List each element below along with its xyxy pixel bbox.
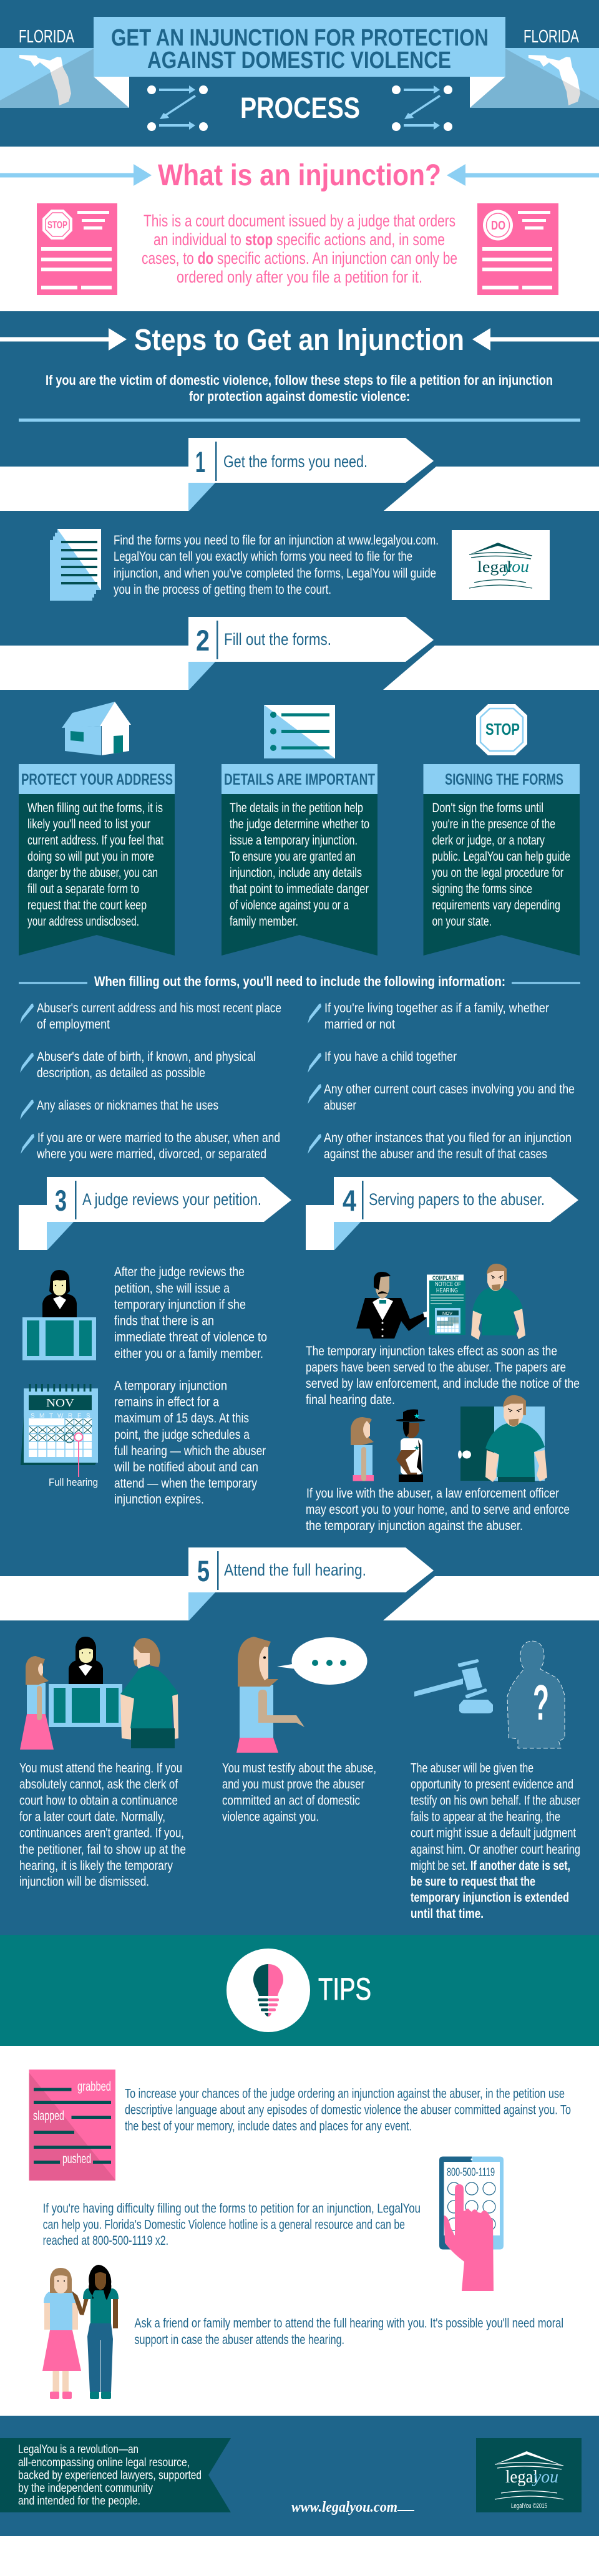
icon: descriptive document: slapped [33,2109,64,2123]
step 1 banner [0,438,599,511]
figure: woman in teal shirt and jeans [72,2265,119,2399]
step 5 text column 1: absolutely cannot, ask the clerk of [19,1778,178,1791]
icon: unknown person silhouette: ? [533,1675,549,1730]
icon: checklist [264,705,335,758]
step 3 banner [19,1177,291,1250]
list: right column: against the abuser and the result of that cases [324,1147,547,1161]
icon: calendar: NOV [46,1397,74,1409]
panel: details are important: DETAILS ARE IMPORTANT [224,771,375,788]
step 3 banner: 3 [55,1184,67,1217]
heading: tips: TIPS [318,1972,371,2007]
icon: light bulb [226,1949,310,2032]
section heading: steps [0,324,599,357]
list: left column: description, as detailed as possible [37,1066,205,1080]
icon: calendar [21,1384,98,1488]
tip 1 text [125,2087,571,2134]
step 1 banner: 1 [195,445,205,478]
step 5 text column 1: the petitioner, fail to show up at the [19,1842,186,1857]
figure: woman in blue shirt and pink skirt [42,2268,81,2399]
step 3 banner: A judge reviews your petition. [82,1190,261,1209]
tip 3 text [135,2317,563,2347]
about ribbon: and intended for the people. [18,2495,140,2508]
panel: signing the forms: on your state. [432,914,492,929]
icon: complaint and notice of hearing papers [427,1275,465,1335]
step 3 text second paragraph [114,1379,266,1507]
logo: LegalYou white box: you [502,557,529,576]
illustration: courtroom hearing [20,1637,178,1750]
list: left column: where you were married, divorced, or separated [36,1147,266,1161]
icon: calendar: S [31,1413,35,1420]
panel: details are important: To ensure you are granted an [230,850,356,864]
tip 3 text: support in case the abuser attends the hearing. [135,2333,344,2347]
step 5 text column 3: The abuser will be given the [411,1761,533,1775]
step 5 text column 3: until that time. [411,1907,484,1921]
illustration: officer escort at door [351,1395,547,1482]
desk [49,1684,122,1727]
icon: descriptive document [29,2070,115,2181]
icon: phone with hand [439,2157,504,2291]
step 3 text first paragraph: petition, she will issue a [114,1281,230,1296]
step 2 banner [0,617,599,690]
icon: stack of forms [50,529,101,601]
label: Florida left: FLORIDA [19,27,74,47]
tip 1 text: the best of your memory, include dates and places for any event. [125,2119,412,2134]
step 3 text second paragraph: point, the judge schedules a [114,1428,250,1442]
icon: calendar: T [49,1413,53,1420]
subtitle: process: PROCESS [240,91,360,124]
icon: process arrows right [392,85,452,131]
step 5 text column 1 [19,1761,186,1889]
intro text [46,372,553,404]
step 5 text column 1: injunction will be dismissed. [19,1875,149,1889]
list: right column: If you're living together as if a family, whether [324,1001,549,1015]
step 5 text column 2: committed an act of domestic [222,1794,360,1808]
heading: What is an injunction? [158,159,441,192]
step 4 banner: 4 [343,1184,356,1217]
panel: protect your address: likely you'll need to list your [27,817,150,831]
step 3 text second paragraph: maximum of 15 days. At this [114,1411,249,1426]
step 5 text column 2: violence against you. [222,1810,319,1824]
section: what is an injunction [0,159,599,295]
about ribbon [0,2438,231,2512]
list: left column: If you are or were married to the abuser, when and [37,1131,280,1145]
panel: signing the forms [423,764,580,956]
icon: do document: DO [491,219,505,233]
panel: details are important: injunction, include any details [230,866,362,880]
step 4 banner: Serving papers to the abuser. [369,1190,545,1209]
panel: details are important: family member. [230,914,298,929]
step 5 banner [0,1547,599,1620]
step 1 text: Find the forms you need to file for an injunction at www.legalyou.com. [114,533,439,548]
about ribbon: backed by experienced lawyers, supported [18,2469,202,2482]
illustration: two friends [42,2265,119,2399]
list: right column: abuser [324,1098,356,1113]
icon: house [62,702,131,755]
list: left column: Abuser's current address and his most recent place [37,1001,281,1015]
panel: signing the forms: clerk or judge, or a notary [432,833,545,848]
step 5 text column 3: might be set. If another date is set, [411,1859,570,1873]
figure: woman petitioner [20,1656,54,1750]
step 4 text first paragraph [306,1344,580,1407]
website url: www.legalyou.com [291,2499,397,2515]
icon: calendar: Full hearing [49,1476,98,1488]
panel: signing the forms: Don't sign the forms until [432,801,543,815]
logo: LegalYou footer box [476,2438,582,2512]
step 3 text second paragraph: attend — when the temporary [114,1476,257,1491]
step 1 text: injunction, and when you've completed the forms, LegalYou will guide [114,566,436,581]
icon: do document [477,203,558,295]
step 3 text first paragraph: either you or a family member. [114,1347,263,1361]
step 3 text first paragraph: immediate threat of violence to [114,1330,267,1345]
intro text: for protection against domestic violence: [189,389,410,404]
logo: LegalYou white box [452,530,550,600]
panel: protect your address: danger by the abuser, you can [27,866,158,880]
panel: signing the forms: requirements vary depending [432,898,560,913]
step 3 text second paragraph: remains in effect for a [114,1395,219,1410]
definition text: cases, to do specific actions. An injunction can only be [142,249,457,268]
icon: stop sign: STOP [485,720,520,738]
figure: police officer: ★ [414,1445,420,1452]
list: right column [308,1001,575,1161]
icon: calendar: M [39,1413,44,1420]
logo: LegalYou footer box: you [532,2467,558,2487]
step 3 text second paragraph: full hearing — which the abuser [114,1444,266,1458]
panel: signing the forms: signing the forms since [432,882,532,896]
step 3 text second paragraph: will be notified about and can [114,1460,258,1474]
figure: officer in suit [356,1272,431,1339]
figure: abuser at door [485,1395,547,1482]
step 5 text column 1: court how to obtain a continuance [19,1794,178,1808]
icon: gavel [414,1659,493,1713]
list: left column: Any aliases or nicknames that he uses [37,1098,218,1113]
icon: unknown person silhouette [507,1641,565,1748]
definition text: ordered only after you file a petition for it. [177,268,422,286]
about ribbon: all-encompassing online legal resource, [18,2456,190,2469]
step 5 text column 2: You must testify about the abuse, [222,1761,376,1775]
icon: process arrows left [147,85,208,131]
step 4 text second paragraph: the temporary injunction against the abuser. [306,1519,523,1533]
step 5 text column 1: for a later court date. Normally, [19,1810,165,1824]
tip 2 text: can help you. Florida's Domestic Violence hotline is a general resource and can be [43,2218,405,2232]
icon: phone with hand: 800-500-1119 [447,2166,495,2179]
step 3 text second paragraph: A temporary injunction [114,1379,227,1393]
icon: calendar: W [57,1413,64,1420]
panel: protect your address: your address undisclosed. [27,914,139,929]
list: left column: Abuser's date of birth, if known, and physical [37,1050,256,1064]
icon: judge at bench [22,1270,96,1360]
panel: protect your address: request that the court keep [27,898,147,913]
panel: details are important: The details in the petition help [230,801,363,815]
step 5 text column 2: and you must prove the abuser [222,1778,364,1791]
step 3 text first paragraph [114,1265,267,1361]
icon: complaint and notice of hearing papers: HEARING [436,1287,458,1294]
title banner [94,17,505,77]
step 4 text first paragraph: final hearing date. [306,1393,395,1407]
step 5 text column 1: You must attend the hearing. If you [19,1761,182,1775]
step 3 text first paragraph: finds that there is an [114,1314,214,1329]
tip 2 text [43,2202,421,2248]
panel: protect your address: When filling out the forms, it is [27,801,163,815]
icon: calendar: F [77,1413,81,1420]
panel: protect your address: doing so will put you in more [27,850,154,864]
title banner: GET AN INJUNCTION FOR PROTECTION [111,25,489,51]
figure: police officer [396,1410,426,1482]
icon: Florida map right [528,55,580,105]
panel: details are important: issue a temporary injunction. [230,833,358,848]
figure: woman from behind [351,1417,374,1481]
step 5 text column 3: fails to appear at the hearing, the [411,1810,560,1824]
tip 2 text: If you're having difficulty filling out the forms to petition for an injunction, LegalYou [43,2202,421,2215]
icon: door [458,1407,545,1481]
header panel [0,0,599,147]
panel: protect your address: current address. If you feel that [27,833,163,848]
step 5 banner: 5 [197,1554,210,1587]
illustration: officer serving papers [356,1264,525,1340]
tips band [0,1935,599,2046]
icon: calendar: R [68,1413,72,1420]
footer panel [0,2416,599,2536]
figure: police officer: ★ [414,1413,420,1420]
arrow: left [0,164,152,186]
step 3 text first paragraph: temporary injunction if she [114,1298,246,1312]
step 1 text: LegalYou can tell you exactly which forms you need to file for the [114,550,412,564]
step 5 text column 3: be sure to request that the [411,1875,535,1889]
arrow: right [447,164,599,186]
panel: details are important: the judge determine whether to [230,817,369,831]
step 1 text [114,533,439,597]
logo: LegalYou white box: legal [477,559,512,576]
definition text: This is a court document issued by a judge that orders [144,211,455,230]
list: left column [20,1001,281,1161]
panel: details are important: that point to immediate danger [230,882,369,896]
step 3 text second paragraph: injunction expires. [114,1493,204,1507]
definition text [142,211,457,286]
step 5 banner: Attend the full hearing. [224,1561,366,1579]
icon: Florida map left [19,55,71,105]
panel: protect your address: fill out a separate form to [27,882,139,896]
step 5 text column 1: continuances aren't granted. If you, [19,1826,184,1841]
list: right column: married or not [324,1017,395,1032]
arrow: left [0,328,127,351]
step 4 banner [306,1177,578,1250]
icon: calendar: S [86,1413,90,1420]
title banner: AGAINST DOMESTIC VIOLENCE [147,47,451,74]
logo: LegalYou footer box: LegalYou ©2015 [511,2502,547,2510]
icon: stop document [37,203,117,295]
icon: descriptive document: grabbed [77,2080,111,2094]
panel: protect your address: PROTECT YOUR ADDRESS [21,771,173,788]
about ribbon: LegalYou is a revolution—an [18,2443,139,2456]
figure: abuser in green shirt [471,1264,525,1340]
icon: stop sign [476,704,527,755]
arrow: right [472,328,599,351]
step 1 text: you in the process of getting them to the court. [114,583,331,597]
icon: complaint and notice of hearing papers: COMPLAINT [432,1275,459,1281]
definition text: an individual to stop specific actions and, in some [153,230,445,249]
icon: complaint and notice of hearing papers: NOV [442,1312,452,1316]
icon: descriptive document: pushed [62,2152,91,2166]
background: dark blue main section [0,311,599,1935]
illustration: woman testifying [236,1637,367,1753]
list: left column: of employment [37,1017,110,1032]
step 1 banner: Get the forms you need. [223,452,368,471]
panel: details are important [222,764,377,956]
tip 2 text: reached at 800-500-1119 x2. [43,2234,168,2248]
figure: judge [69,1637,103,1684]
step 4 text second paragraph: If you live with the abuser, a law enforcement officer [306,1486,559,1501]
step 5 text column 2 [222,1761,376,1824]
panel: details are important: of violence against you or a [230,898,349,913]
speech bubble [277,1637,367,1685]
heading: Steps to Get an Injunction [134,324,464,357]
panel: protect your address [19,764,175,956]
information heading: When filling out the forms, you'll need to include the following information: [94,974,505,989]
figure: abuser from side [120,1638,178,1748]
panel: signing the forms: you're in the presence of the [432,817,555,831]
step 5 text column 3 [411,1761,580,1921]
step 3 text first paragraph: After the judge reviews the [114,1265,245,1279]
logo: LegalYou footer box: legal [505,2467,538,2487]
step 2 banner: 2 [196,624,210,657]
list: right column: If you have a child together [324,1050,457,1064]
icon: stop document: STOP [47,219,67,231]
step 5 text column 1: hearing, it is likely the temporary [19,1859,173,1873]
about ribbon: by the independent community [18,2482,153,2495]
step 4 text second paragraph [306,1486,570,1533]
icon: complaint and notice of hearing papers: NOTICE OF [435,1281,461,1288]
step 2 banner: Fill out the forms. [224,630,331,649]
